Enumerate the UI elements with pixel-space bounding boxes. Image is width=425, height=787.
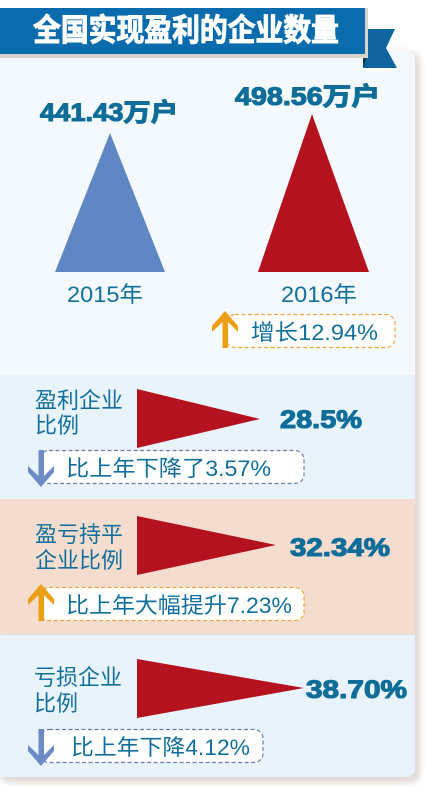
label 2015: 2015年 [67,282,143,307]
value 38.70%: 38.70% [306,676,407,704]
panel: loss row [0,635,415,777]
value 2015: 441.43万户 [40,99,178,127]
title: 全国实现盈利的企业数量 [33,13,339,48]
label: loss share: 比例 [34,691,78,716]
icon: down arrow [28,729,54,766]
callout: growth 12.94%: 增长12.94% [251,320,378,345]
value 28.5%: 28.5% [280,406,362,434]
callout: up 7.23%: 比上年大幅提升7.23% [66,593,292,618]
callout: down 3.57% [40,450,304,484]
icon: down arrow [28,450,54,487]
label: break-even share: 企业比例 [35,548,123,573]
label: profitable share: 盈利企业 [35,388,123,413]
icon: up arrow [28,584,54,621]
label: loss share: 亏损企业 [34,665,122,690]
triangle: profitable [137,389,260,448]
triangle: break-even [137,516,276,575]
label 2016: 2016年 [281,282,357,307]
callout: down 3.57%: 比上年下降了3.57% [66,456,271,481]
triangle 2016 [258,114,369,272]
callout: growth 12.94% [226,314,395,348]
triangle: loss [137,659,304,718]
label: profitable share: 比例 [35,413,79,438]
title banner [0,8,368,58]
icon: up arrow [212,311,238,348]
label: break-even share: 盈亏持平 [35,522,123,547]
callout: down 4.12%: 比上年下降4.12% [71,735,250,760]
triangle 2015 [55,133,165,272]
callout: down 4.12% [40,730,263,762]
value 32.34%: 32.34% [290,534,390,562]
panel: break-even row [0,499,415,634]
panel: profitable row [0,375,415,499]
callout: up 7.23% [40,588,304,620]
banner ribbon tail [362,28,399,70]
value 2016: 498.56万户 [235,83,380,111]
